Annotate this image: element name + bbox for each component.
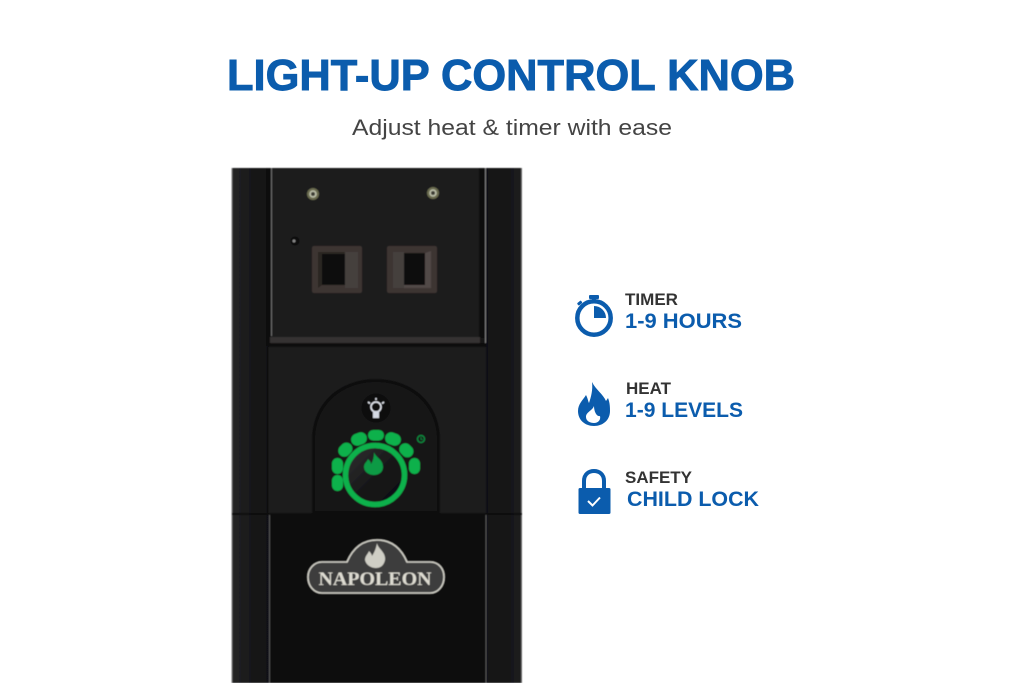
column body: [232, 168, 522, 683]
label: TIMER: [625, 291, 678, 309]
label: HEAT: [626, 380, 671, 398]
right socket: [387, 246, 437, 293]
icon: stopwatch: [577, 295, 611, 335]
arch recess: [312, 379, 440, 513]
icon: knob flame: [364, 452, 383, 475]
feature: timer: [577, 291, 742, 335]
product photo: control column: [232, 168, 522, 683]
upper panel: [266, 168, 486, 348]
label: SAFETY: [625, 469, 692, 487]
icon: badge flame: [365, 543, 385, 568]
icon: light bulb button: [362, 394, 390, 422]
feature: heat: [578, 380, 743, 426]
control panel: [267, 347, 486, 513]
brand badge: [308, 540, 444, 593]
value: 1-9 LEVELS: [625, 399, 743, 422]
heat level indicators: [332, 430, 420, 491]
screws: [307, 187, 439, 200]
timer indicator: [418, 436, 424, 442]
icon: flame: [578, 382, 610, 426]
lower panel: [232, 513, 522, 683]
small indicator: [290, 236, 300, 246]
knob ring: [346, 446, 404, 504]
brand badge: NAPOLEON: [318, 569, 432, 590]
feature: safety: [578, 469, 759, 514]
icon: padlock: [578, 471, 610, 514]
left socket: [312, 246, 362, 293]
value: CHILD LOCK: [627, 488, 759, 511]
value: 1-9 HOURS: [625, 310, 742, 333]
title: LIGHT-UP CONTROL KNOB: [227, 51, 795, 100]
subtitle: Adjust heat & timer with ease: [352, 115, 672, 140]
